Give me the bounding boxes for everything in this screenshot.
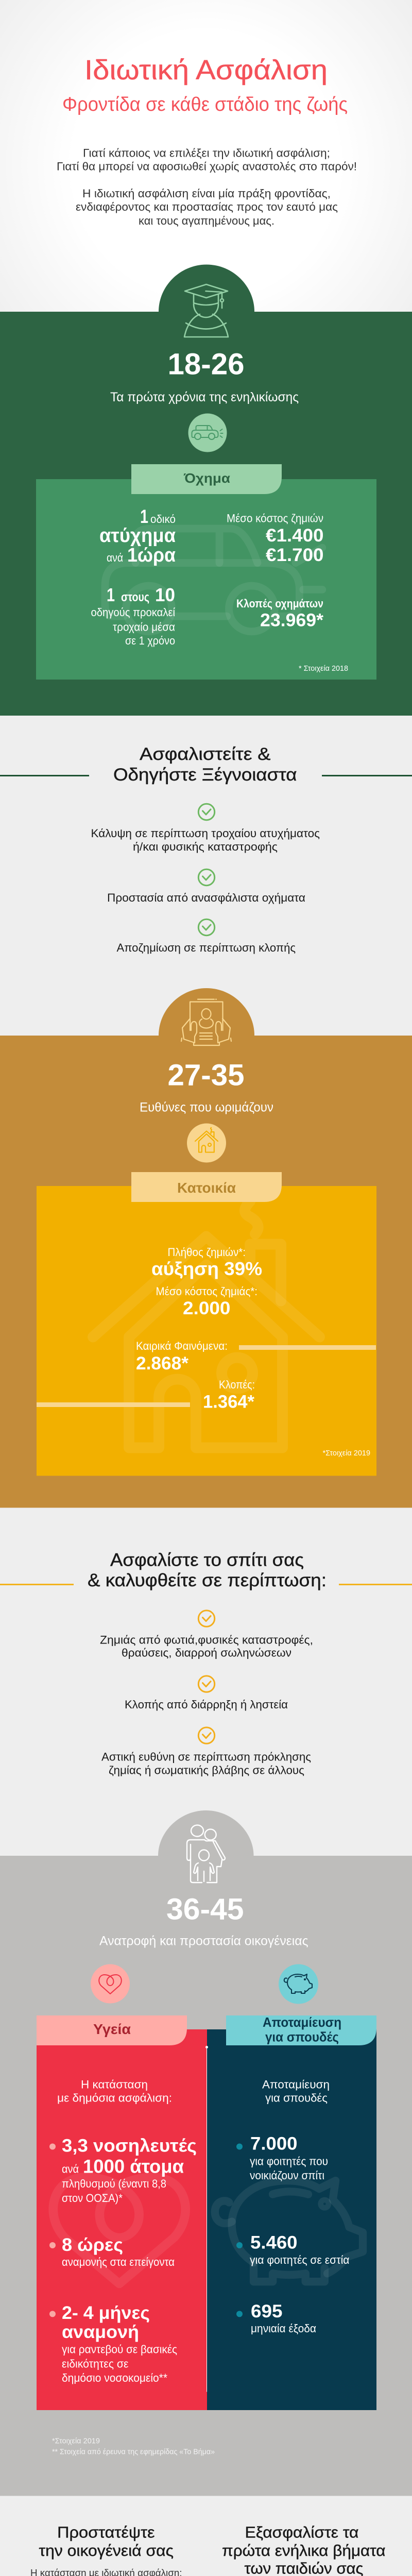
footnotes: ** Στοιχεία από έρευνα της εφημερίδας «Το Βήμα» bbox=[52, 2448, 215, 2456]
panel: age 27-35 bbox=[0, 988, 412, 1507]
icon: graduate bbox=[184, 284, 228, 337]
damage cost stat: €1.700 bbox=[266, 545, 323, 565]
drivers stat: οδηγούς προκαλεί bbox=[91, 606, 175, 619]
benefit text: Αποζημίωση σε περίπτωση κλοπής bbox=[116, 941, 296, 954]
footnote: * Στοιχεία 2018 bbox=[299, 664, 348, 673]
panel: secure children's first steps bbox=[222, 2523, 386, 2576]
heading: Ασφαλίστε το σπίτι σας bbox=[110, 1550, 304, 1570]
icon: check bbox=[198, 1611, 215, 1626]
accident stat: 1 bbox=[140, 506, 148, 527]
intro panel bbox=[0, 0, 412, 314]
tab: home: Κατοικία bbox=[177, 1180, 236, 1196]
weather events: Καιρικά Φαινόμενα: bbox=[136, 1340, 228, 1352]
thefts stat: 23.969* bbox=[260, 610, 323, 631]
drivers stat: τροχαίο μέσα bbox=[113, 620, 175, 634]
panel: protect your family bbox=[19, 2523, 194, 2576]
appointments wait stat: ειδικότητες σε bbox=[62, 2358, 129, 2370]
tab: education savings: για σπουδές bbox=[265, 2029, 339, 2044]
heading: & καλυφθείτε σε περίπτωση: bbox=[88, 1570, 327, 1590]
thefts stat bbox=[236, 597, 323, 631]
panel: drive carefree bbox=[0, 744, 412, 954]
drivers stat: 10 bbox=[155, 584, 175, 605]
icon: check bbox=[198, 869, 215, 886]
appointments wait stat: αναμονή bbox=[62, 2322, 139, 2342]
tab: education savings: Αποταμίευση bbox=[263, 2014, 341, 2030]
age subtitle: Ανατροφή και προστασία οικογένειας bbox=[99, 1934, 308, 1948]
intro text: Η ιδιωτική ασφάλιση είναι μία πράξη φροντίδας, bbox=[82, 187, 331, 200]
tab: health bbox=[37, 2015, 187, 2045]
nurses stat: 3,3 νοσηλευτές bbox=[62, 2136, 197, 2156]
age subtitle: Ευθύνες που ωριμάζουν bbox=[140, 1100, 273, 1115]
footnotes bbox=[52, 2436, 215, 2456]
column intro: Η κατάσταση bbox=[81, 2078, 148, 2091]
heading bbox=[88, 1550, 327, 1590]
age subtitle: Τα πρώτα χρόνια της ενηλικίωσης bbox=[110, 390, 299, 404]
appointments wait stat: για ραντεβού σε βασικές bbox=[62, 2343, 177, 2355]
heading bbox=[222, 2523, 386, 2576]
emergency wait stat: 8 ώρες bbox=[62, 2235, 123, 2255]
thefts stat: Κλοπές οχημάτων bbox=[236, 597, 323, 610]
tab: education savings bbox=[226, 2014, 376, 2045]
column intro bbox=[262, 2078, 330, 2105]
panel: home data bbox=[37, 1172, 376, 1476]
intro text bbox=[57, 146, 357, 227]
column divider bbox=[205, 2046, 208, 2392]
damage cost stat: Μέσο κόστος ζημιών bbox=[227, 512, 323, 524]
nurses stat: στον ΟΟΣΑ)* bbox=[62, 2192, 123, 2205]
average claim cost: Μέσο κόστος ζημιάς*: bbox=[156, 1285, 258, 1298]
benefit text: Κλοπής από διάρρηξη ή ληστεία bbox=[125, 1698, 288, 1711]
icon: hands holding document bbox=[181, 999, 231, 1045]
intro text: Γιατί θα μπορεί να αφοσιωθεί χωρίς αναστολές στο παρόν! bbox=[57, 160, 357, 173]
dorm cost stat: για φοιτητές σε εστία bbox=[250, 2253, 350, 2266]
watermark heart bbox=[53, 2177, 185, 2284]
icon: piggy bank badge bbox=[279, 1964, 318, 2004]
heading: Εξασφαλίστε τα bbox=[245, 2523, 359, 2541]
rent cost stat: 7.000 bbox=[250, 2134, 298, 2154]
benefit text: ζημίας ή σωματικής βλάβης σε άλλους bbox=[109, 1764, 304, 1777]
emergency wait stat bbox=[49, 2235, 175, 2268]
nurses stat bbox=[49, 2136, 197, 2205]
watermark piggy bank bbox=[215, 2181, 363, 2282]
average claim cost: 2.000 bbox=[183, 1298, 231, 1318]
thefts bbox=[37, 1378, 255, 1412]
monthly expenses stat: μηνιαία έξοδα bbox=[251, 2322, 316, 2335]
benefit text: Κάλυψη σε περίπτωση τροχαίου ατυχήματος bbox=[91, 827, 320, 840]
weather events: 2.868* bbox=[136, 1353, 188, 1374]
panel: health bbox=[37, 2015, 207, 2410]
claims count: αύξηση 39% bbox=[151, 1258, 262, 1279]
appointments wait stat: δημόσιο νοσοκομείο** bbox=[62, 2371, 167, 2384]
benefit text: Προστασία από ανασφάλιστα οχήματα bbox=[107, 891, 305, 904]
benefit text: θραύσεις, διαρροή σωληνώσεων bbox=[122, 1647, 291, 1659]
watermark car bbox=[105, 529, 322, 632]
damage cost stat bbox=[227, 512, 323, 565]
footnote: *Στοιχεία 2019 bbox=[322, 1449, 370, 1458]
heading: Οδηγήστε Ξέγνοιαστα bbox=[113, 765, 297, 785]
emergency wait stat: αναμονής στα επείγοντα bbox=[62, 2256, 175, 2268]
damage cost stat: €1.400 bbox=[266, 526, 323, 546]
accident stat: ατύχημα bbox=[99, 525, 176, 547]
benefit text bbox=[101, 1751, 311, 1777]
benefit text: Αστική ευθύνη σε περίπτωση πρόκλησης bbox=[101, 1751, 311, 1763]
icon: family bbox=[187, 1825, 225, 1883]
panel: insure your home bbox=[0, 1550, 412, 1777]
column intro bbox=[57, 2078, 172, 2105]
intro text: Γιατί κάποιος να επιλέξει την ιδιωτική ασφάλιση; bbox=[83, 146, 330, 160]
icon: car badge bbox=[188, 413, 227, 452]
age heading: 27-35 bbox=[168, 1058, 244, 1092]
drivers stat: στους bbox=[121, 590, 149, 604]
tab: home bbox=[131, 1172, 282, 1202]
tab: health: Υγεία bbox=[93, 2021, 131, 2037]
heading: πρώτα ενήλικα βήματα bbox=[222, 2541, 386, 2560]
drivers stat: 1 bbox=[107, 584, 115, 605]
title: Ιδιωτική Ασφάλιση bbox=[84, 55, 328, 86]
age heading: 36-45 bbox=[166, 1893, 244, 1926]
rent cost stat: για φοιτητές που bbox=[250, 2155, 328, 2167]
icon: heart badge bbox=[91, 1964, 130, 2003]
heading: Ασφαλιστείτε & bbox=[140, 744, 271, 764]
column intro: με δημόσια ασφάλιση: bbox=[57, 2092, 172, 2105]
intro text: και τους αγαπημένους μας. bbox=[139, 214, 274, 227]
icon: check bbox=[198, 804, 215, 820]
appointments wait stat: 2- 4 μήνες bbox=[62, 2303, 150, 2323]
drivers stat: σε 1 χρόνο bbox=[125, 634, 175, 647]
heading bbox=[113, 744, 297, 785]
thefts: Κλοπές: bbox=[219, 1378, 255, 1391]
dorm cost stat bbox=[236, 2233, 350, 2266]
tab: vehicle: Όχημα bbox=[183, 470, 230, 486]
claims count bbox=[151, 1246, 262, 1279]
panel: education savings bbox=[207, 2014, 376, 2410]
column intro: για σπουδές bbox=[265, 2092, 328, 2105]
nurses stat: ανά bbox=[62, 2163, 79, 2175]
monthly expenses stat bbox=[236, 2301, 316, 2335]
benefit text bbox=[100, 1634, 313, 1659]
nurses stat: πληθυσμού (έναντι 8,8 bbox=[62, 2177, 166, 2190]
intro text: ενδιαφέροντος και προστασίας προς τον εαυτό μας bbox=[76, 200, 338, 213]
heading bbox=[39, 2523, 174, 2560]
panel: age 18-26 bbox=[0, 265, 412, 716]
appointments wait stat bbox=[49, 2303, 177, 2384]
panel: age 36-45 bbox=[0, 1810, 412, 2496]
rent cost stat bbox=[236, 2134, 328, 2182]
rent cost stat: νοικιάζουν σπίτι bbox=[250, 2169, 324, 2182]
accident stat: ανά bbox=[107, 551, 123, 564]
accident stat: οδικό bbox=[150, 513, 176, 526]
weather events bbox=[136, 1340, 376, 1374]
footnotes: *Στοιχεία 2019 bbox=[52, 2436, 100, 2445]
panel: vehicle data bbox=[36, 464, 376, 680]
watermark house bbox=[93, 1201, 319, 1448]
column intro: Αποταμίευση bbox=[262, 2078, 330, 2091]
claims count: Πλήθος ζημιών*: bbox=[168, 1246, 246, 1259]
dorm cost stat: 5.460 bbox=[250, 2233, 298, 2252]
benefit text: Ζημιάς από φωτιά,φυσικές καταστροφές, bbox=[100, 1634, 313, 1647]
age heading: 18-26 bbox=[168, 347, 244, 381]
monthly expenses stat: 695 bbox=[251, 2301, 282, 2321]
thefts: 1.364* bbox=[203, 1392, 254, 1412]
icon: house badge bbox=[187, 1123, 226, 1162]
icon: check bbox=[198, 1727, 215, 1743]
accident stat bbox=[99, 506, 176, 566]
drivers stat bbox=[91, 584, 175, 647]
benefit text bbox=[91, 827, 320, 853]
average claim cost bbox=[156, 1285, 258, 1318]
nurses stat: 1000 άτομα bbox=[83, 2156, 184, 2177]
heading: την οικογένειά σας bbox=[39, 2541, 174, 2560]
icon: check bbox=[198, 1676, 215, 1692]
heading: Προστατέψτε bbox=[57, 2523, 155, 2541]
subtitle: Φροντίδα σε κάθε στάδιο της ζωής bbox=[62, 94, 348, 115]
benefit text: ή/και φυσικής καταστροφής bbox=[133, 840, 278, 853]
accident stat: 1ώρα bbox=[127, 545, 176, 566]
tab: vehicle bbox=[131, 464, 282, 494]
icon: check bbox=[198, 919, 215, 936]
